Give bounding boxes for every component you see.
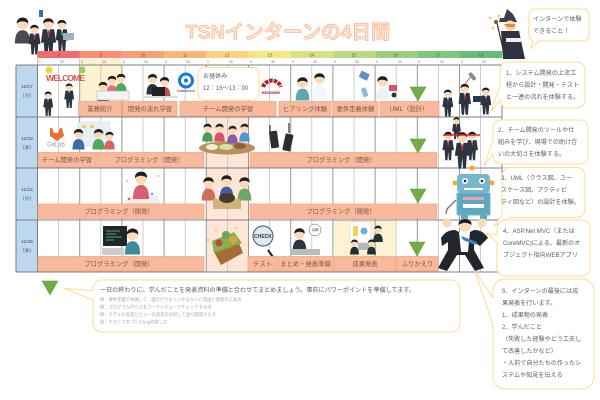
- timeline header: 0: [123, 60, 125, 64]
- callout: lunch break: お昼休み: [203, 72, 227, 80]
- icon: Nulab logo: Nulabmood: [177, 89, 195, 93]
- callout 5: ・人前で自分たちの作ったシ: [502, 359, 581, 367]
- icon: scientist with flying objects: [359, 71, 397, 100]
- timeline header: 30: [102, 60, 106, 64]
- date labels: [20, 84, 34, 254]
- icon: GitLab fox: GitLab: [47, 142, 65, 148]
- callout 1: [491, 62, 585, 111]
- timeline header: 12: [225, 52, 230, 58]
- timeline header: 0: [334, 60, 336, 64]
- callout: lunch break: 12：15～13：00: [203, 85, 249, 92]
- schedule bars: 11/17: 開発の流れ学習: [128, 104, 172, 113]
- callout 3: スケース図、アクティビ: [501, 186, 567, 194]
- date labels: （水）: [20, 247, 34, 254]
- schedule bars: 11/24: プログラミング（開発）: [84, 206, 154, 216]
- timeline header: 0: [292, 60, 294, 64]
- icon: box of vegetables: [207, 227, 243, 265]
- icon: programmer at monitor: [102, 226, 140, 255]
- icon: brainstorming at board: [72, 122, 115, 150]
- schedule bars: 11/17: 要件定義体験: [337, 104, 375, 113]
- icon: cheering team: [442, 117, 480, 169]
- callout: what you can experience: できること！: [533, 28, 569, 35]
- schedule bars: 11/18: [38, 152, 437, 167]
- date labels: 11/24: [21, 187, 33, 193]
- callout 2: いの大切さを体験する。: [498, 150, 565, 158]
- callout 5: 5．インターンの最後には成: [502, 287, 578, 295]
- date labels: 11/25: [21, 239, 33, 245]
- timeline header: 30: [229, 60, 233, 64]
- timeline header: 30: [482, 60, 486, 64]
- icon: presentation: [350, 222, 383, 254]
- timeline header: 0: [418, 60, 420, 64]
- timeline header: 30: [186, 60, 190, 64]
- callout 4: [486, 220, 590, 276]
- icon: welcome banner and two men: [43, 66, 86, 116]
- callout: end of day summary: 一日の終わりに、学んだことを発表資料の準備と合わせてまとめましょう。事前にパワーポイントを準備してます。: [100, 286, 415, 294]
- illustration: four running business people: [15, 10, 74, 56]
- callout: end of day summary: [63, 280, 460, 332]
- icon: strong man: [438, 218, 488, 271]
- timeline header: 8: [58, 52, 61, 58]
- timeline header: 0: [165, 60, 167, 64]
- callout 4: CoreMVC)による、最新のオ: [503, 239, 580, 247]
- schedule bars: 11/25: 成果発表: [352, 259, 378, 268]
- timeline header: 30: [271, 60, 275, 64]
- timeline header: 11: [183, 52, 188, 58]
- timeline header: 14: [310, 52, 315, 58]
- icon: Redmine logo: REDMINE: [262, 90, 281, 95]
- schedule grid: [16, 65, 502, 272]
- callout 1: と一連の流れを体験する。: [506, 93, 579, 101]
- schedule bars: 11/17: チーム開発の学習: [203, 104, 253, 113]
- icon: wizard: [489, 9, 525, 59]
- timeline header: 30: [440, 60, 444, 64]
- icon: robot: [446, 166, 494, 219]
- date labels: 11/18: [21, 136, 33, 142]
- schedule bars: 11/18: プログラミング（開発）: [306, 155, 376, 164]
- timeline header: 0: [250, 60, 252, 64]
- icon: walkie talkies: [269, 123, 294, 152]
- icon: girl preparing slides: 令和: [312, 227, 319, 232]
- timeline header: [38, 51, 502, 65]
- callout 4: ブジェクト指向WEBアプリ: [503, 251, 578, 259]
- callout: lunch break: [198, 68, 259, 100]
- icon: girl preparing slides: [290, 224, 321, 255]
- timeline header: 16: [394, 52, 399, 58]
- icon: two staff at monitor: [144, 74, 178, 98]
- timeline header: 0: [461, 60, 463, 64]
- schedule bars: 11/18: チーム開発の学習: [42, 155, 92, 164]
- timeline header: 30: [313, 60, 317, 64]
- callout 4: 4．ASP.Net MVC（または: [503, 228, 575, 235]
- icon: Nulab logo: [177, 74, 195, 93]
- schedule bars: 11/25: [38, 256, 438, 271]
- title: TSNインターンの4日間: [186, 22, 390, 44]
- callout 5: （失敗した経験やどう工夫し: [502, 335, 581, 343]
- timeline header: 30: [398, 60, 402, 64]
- icon: Redmine logo: [262, 81, 281, 95]
- callout 5: ステムや知見を伝える: [502, 371, 563, 379]
- icon: CHECK magnifier: CHECK: [254, 234, 272, 240]
- callout 2: [484, 120, 588, 166]
- schedule bars: 11/17: 業務紹介: [87, 104, 113, 113]
- callout 5: 2．学んだこと: [502, 323, 542, 331]
- icon: CHECK magnifier: [253, 226, 273, 257]
- date labels: 11/17: [21, 84, 33, 90]
- schedule bars: 11/25: ふりかえり: [402, 260, 433, 268]
- timeline header: 13: [268, 52, 273, 58]
- callout: end of day summary: 例：テストで気づいたbugの直し方: [100, 318, 168, 326]
- schedule bars: 11/17: UML（設計）: [390, 104, 428, 113]
- icon: TV crew: [442, 72, 491, 117]
- icon: welcome banner and two men: WELCOME: [46, 73, 85, 83]
- timeline header: 17: [436, 52, 441, 58]
- callout: end of day summary: 例：モデルの実装とビューの実装を分担して並行開発する点: [100, 311, 217, 318]
- timeline header: 30: [144, 60, 148, 64]
- schedule bars: 11/24: [38, 204, 437, 218]
- callout: what you can experience: [529, 9, 589, 49]
- icon: hearing with doctor: [296, 73, 326, 100]
- callout 2: 組みを学び、現場での助け合: [498, 138, 577, 146]
- callout 5: て改善したかなど）: [502, 347, 557, 355]
- callout 5: 果発表を行います。: [502, 299, 556, 307]
- date labels: （火）: [20, 196, 34, 202]
- schedule bars: 11/25: テスト: [253, 260, 272, 268]
- review markers: [409, 87, 426, 256]
- timeline header: 0: [38, 60, 40, 64]
- schedule bars: 11/17: ヒアリング体験: [283, 104, 328, 113]
- callout 5: [475, 271, 594, 389]
- icon: girl with confetti: [125, 172, 161, 204]
- legend marker: [42, 281, 58, 295]
- timeline header: 30: [60, 60, 64, 64]
- icon: GitLab fox: [47, 128, 65, 148]
- callout 1: 1．システム開発の上流工: [506, 69, 576, 77]
- timeline header: 30: [355, 60, 359, 64]
- timeline header: 10: [141, 52, 146, 58]
- callout: end of day summary: 例：要件定義で失敗して、設計がうまくいかなかった理由と改善の工夫点: [100, 296, 242, 303]
- date labels: （火）: [20, 93, 34, 99]
- callout 3: [494, 168, 585, 226]
- schedule bars: 11/24: プログラミング（開発）: [306, 206, 376, 216]
- timeline header: 9: [100, 52, 103, 58]
- timeline header: 0: [376, 60, 378, 64]
- schedule bars: 11/25: プログラミング（開発）: [84, 259, 154, 268]
- callout 2: 2．チーム開発のツールや仕: [498, 126, 574, 134]
- callout 3: 3．UML（クラス図、ユー: [501, 175, 572, 182]
- date labels: （水）: [20, 144, 34, 151]
- icon: team at desk: [97, 74, 129, 101]
- callout 3: ティ図など）の設計を体験。: [501, 198, 580, 206]
- icon: group meal party: [199, 124, 255, 154]
- timeline header: 15: [352, 52, 357, 58]
- callout 1: 程から設計・開発・テスト: [506, 81, 579, 89]
- callout 5: 1．成果物の発表: [502, 311, 548, 319]
- schedule bars: 11/17: [78, 102, 439, 116]
- callout: end of day summary: 例：プログラムのミスをコードレビューでチェックする点: [100, 304, 212, 310]
- timeline header: 0: [81, 60, 83, 64]
- timeline header: 18: [479, 52, 484, 58]
- icon: three people eating: [202, 175, 251, 209]
- schedule bars: 11/18: プログラミング（開発）: [114, 155, 184, 164]
- callout: what you can experience: インターンで体験: [533, 15, 581, 23]
- timeline header: 0: [207, 60, 209, 64]
- schedule bars: 11/25: まとめ・発表準備: [280, 259, 331, 268]
